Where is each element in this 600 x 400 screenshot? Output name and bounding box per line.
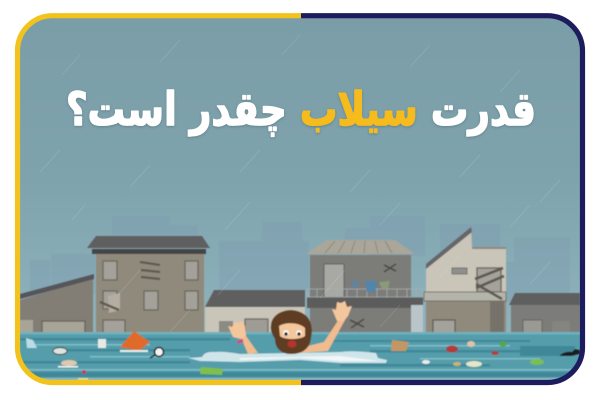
mouth	[288, 340, 296, 348]
debris: plastic bottles	[26, 338, 37, 348]
foam	[188, 351, 387, 363]
distant building silhouettes	[32, 274, 514, 301]
debris: green packet	[200, 367, 223, 375]
debris: orange crate	[120, 331, 150, 351]
rain streaks	[40, 35, 560, 332]
right low house	[509, 293, 580, 333]
town and water illustration	[20, 226, 580, 380]
small grey-roof house	[205, 290, 305, 333]
sky background	[20, 18, 580, 333]
hair and beard	[271, 310, 312, 354]
frame: yellow left half	[14, 13, 301, 386]
collapsed shed	[20, 274, 94, 333]
floating debris	[26, 331, 580, 380]
frame: navy right half	[301, 13, 586, 386]
flood water	[20, 331, 580, 379]
left hand	[228, 321, 246, 339]
debris: cardboard box	[391, 340, 409, 351]
left arm	[240, 335, 258, 354]
damaged apartment building	[87, 236, 210, 333]
eyes	[283, 330, 289, 336]
cream house with boarded door	[424, 227, 506, 333]
two-storey house with balcony	[306, 240, 423, 333]
swimmer calling for help	[188, 301, 387, 363]
right arm	[298, 319, 345, 353]
title: قدرت سیلاب چقدر است؟	[66, 82, 536, 137]
debris: dark animal	[560, 349, 580, 356]
face	[279, 323, 305, 339]
right hand	[332, 301, 352, 321]
debris: life ring	[154, 348, 164, 356]
